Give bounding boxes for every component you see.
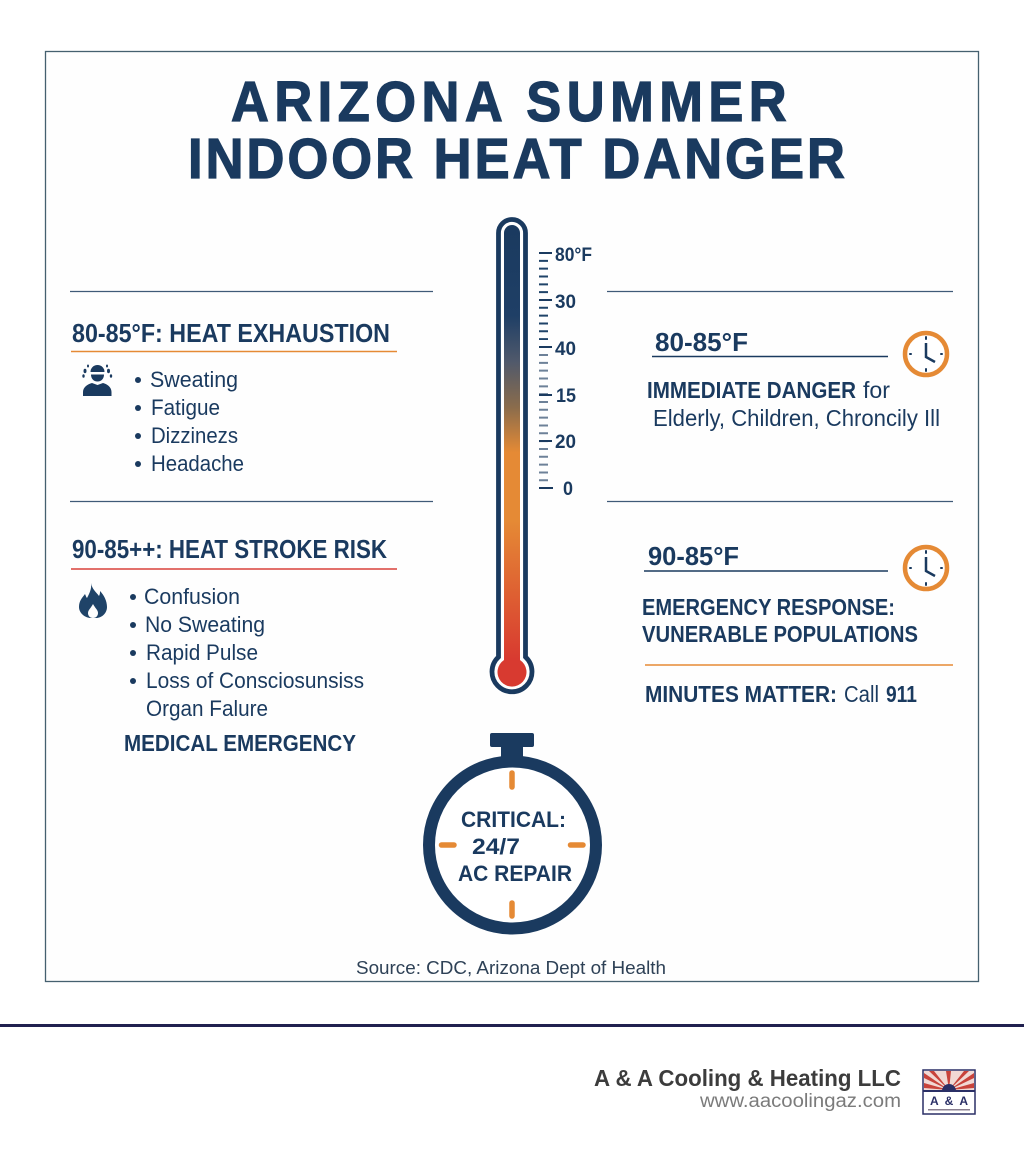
callout: minutes matter: 911 — [886, 681, 917, 707]
thermometer scale: 80°F — [555, 245, 592, 266]
callout: medical emergency: MEDICAL EMERGENCY — [124, 730, 356, 756]
thermometer — [492, 220, 532, 692]
stopwatch text: CRITICAL: — [461, 807, 566, 832]
title: ARIZONA SUMMER — [231, 69, 787, 133]
list: exhaustion symptoms — [135, 367, 244, 476]
icon: clock — [905, 547, 947, 589]
list: heat stroke symptoms: No Sweating — [145, 612, 265, 637]
panel: immediate danger — [647, 327, 947, 431]
list: heat stroke symptoms: Organ Falure — [146, 696, 268, 721]
text: emergency response: EMERGENCY RESPONSE: — [642, 594, 895, 620]
stopwatch — [429, 733, 596, 928]
list: heat stroke symptoms — [130, 584, 364, 721]
text: immediate danger: for — [863, 377, 890, 403]
source note: Source: CDC, Arizona Dept of Health — [356, 957, 666, 978]
list: heat stroke symptoms: Loss of Consciosunsiss — [146, 668, 364, 693]
list: heat stroke symptoms: Rapid Pulse — [146, 640, 258, 665]
thermometer scale: 15 — [556, 386, 576, 407]
list: heat stroke symptoms: Confusion — [144, 584, 240, 609]
list: exhaustion symptoms: Dizzinezs — [151, 423, 238, 448]
text: immediate danger: Elderly, Children, Chroncily Ill — [653, 405, 940, 431]
infographic frame — [46, 52, 978, 982]
stopwatch text: 24/7 — [472, 834, 520, 859]
icon: clock — [905, 333, 947, 375]
logo: A&A — [930, 1094, 968, 1108]
callout: minutes matter: MINUTES MATTER: — [645, 681, 837, 707]
list: exhaustion symptoms: Headache — [151, 451, 244, 476]
callout: minutes matter: Call — [844, 681, 879, 707]
text: immediate danger: IMMEDIATE DANGER — [647, 377, 856, 403]
heading: 80-85F: 80-85°F — [655, 327, 748, 357]
thermometer scale: 20 — [555, 432, 576, 453]
text: emergency response — [642, 594, 918, 647]
text: emergency response: VUNERABLE POPULATIONS — [642, 621, 918, 647]
footer company name: A & A Cooling & Heating LLC — [594, 1065, 901, 1091]
title — [188, 69, 845, 190]
thermometer scale: 0 — [563, 479, 573, 500]
text: immediate danger — [647, 377, 940, 431]
heading: heat exhaustion: 80-85°F: HEAT EXHAUSTION — [72, 318, 390, 348]
footer rule — [0, 1024, 1024, 1027]
icon: sweating person — [82, 364, 112, 396]
stopwatch text — [458, 807, 572, 886]
list: exhaustion symptoms: Sweating — [150, 367, 238, 392]
title: INDOOR HEAT DANGER — [188, 126, 845, 190]
icon: flame — [79, 583, 107, 618]
footer company name: www.aacoolingaz.com — [699, 1091, 901, 1112]
heading: heat stroke: 90-85++: HEAT STROKE RISK — [72, 534, 387, 564]
list: exhaustion symptoms: Fatigue — [151, 395, 220, 420]
thermometer scale: 30 — [555, 292, 576, 313]
stopwatch text: AC REPAIR — [458, 861, 572, 886]
thermometer scale — [539, 245, 592, 500]
thermometer scale: 40 — [555, 339, 576, 360]
heading: 90-85F: 90-85°F — [648, 541, 739, 571]
logo — [923, 1070, 975, 1114]
panel: heat stroke — [71, 534, 397, 756]
panel: emergency response — [642, 541, 953, 707]
panel: heat exhaustion — [71, 318, 397, 476]
footer company name — [594, 1065, 901, 1112]
